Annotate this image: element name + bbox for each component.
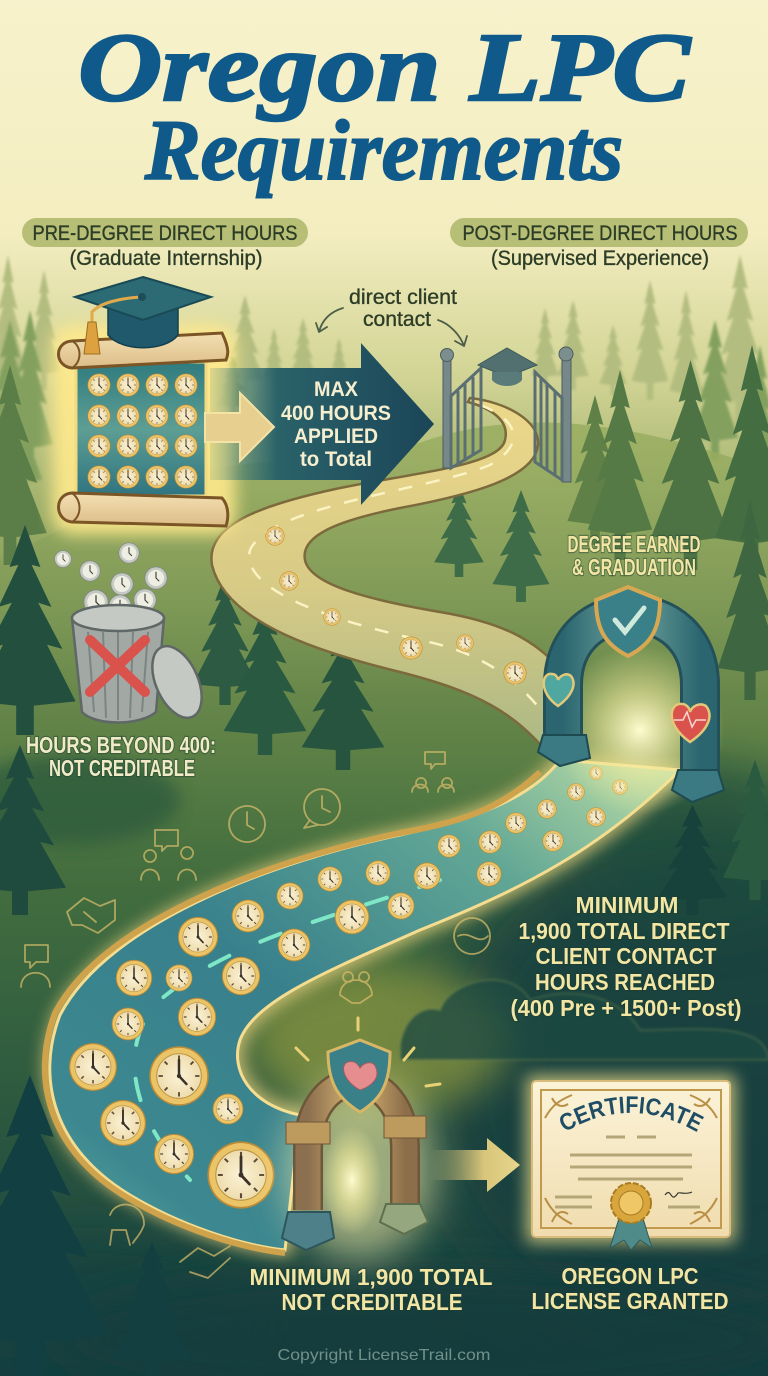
icon: head profile <box>110 1205 144 1245</box>
mid forest trees <box>0 310 768 515</box>
grid of sixteen clocks <box>87 373 198 489</box>
brain shield <box>328 1040 390 1112</box>
bush outline <box>400 980 768 1060</box>
ribbons <box>610 1215 652 1250</box>
certificate <box>514 1063 748 1255</box>
gold seal <box>611 1183 651 1223</box>
icon: open gate with cap <box>440 347 573 482</box>
left arch base <box>538 735 590 766</box>
label: Oregon LPC license granted: OREGON LPC <box>562 1263 698 1289</box>
label: minimum 1,900 total direct client contact hours: HOURS REACHED <box>535 969 715 995</box>
lower ground shading <box>0 760 768 1376</box>
label: minimum 1,900 total not creditable: MINIMUM 1,900 TOTAL <box>250 1264 492 1290</box>
label: hours beyond 400: NOT CREDITABLE <box>49 755 195 781</box>
lower river clocks <box>69 766 628 1209</box>
label: Oregon LPC license granted: LICENSE GRANTED <box>532 1288 728 1314</box>
label: Oregon LPC license granted <box>532 1263 728 1314</box>
bottom scroll roll <box>58 493 228 526</box>
signature <box>665 1192 692 1197</box>
copyright: Copyright LicenseTrail.com <box>278 1347 490 1364</box>
left base <box>282 1212 334 1250</box>
gold line icons: counseling scenes <box>21 752 490 1278</box>
red heart with pulse <box>672 704 709 742</box>
far forest tree line <box>0 255 766 425</box>
heading: pre-degree direct hours <box>22 218 308 270</box>
right base <box>380 1204 428 1234</box>
glow rays <box>296 1018 440 1086</box>
inner cream arrow <box>205 393 274 461</box>
label: minimum 1,900 total direct client contact hours: MINIMUM <box>576 892 678 918</box>
label: minimum 1,900 total direct client contact hours: CLIENT CONTACT <box>536 943 716 969</box>
arrow: to certificate <box>430 1138 520 1192</box>
title: Oregon LPC <box>78 14 692 121</box>
label: hours beyond 400: HOURS BEYOND 400: <box>26 732 216 758</box>
icon: graduation cap <box>75 277 211 354</box>
discarded clocks <box>54 542 168 618</box>
icon: person with speech bubble <box>21 945 50 987</box>
arrow label: MAX <box>314 378 358 401</box>
panel: scroll of pre-degree hours <box>52 325 236 535</box>
arrow label: APPLIED <box>294 425 378 448</box>
certificate corner ornaments <box>545 1095 717 1224</box>
label: minimum 1,900 total not creditable: NOT CREDITABLE <box>282 1289 462 1315</box>
label: minimum 1,900 total direct client contact hours: 1,900 TOTAL DIRECT <box>518 918 730 944</box>
top scroll roll <box>58 333 228 368</box>
label: degree earned and graduation: & GRADUATION <box>572 554 696 580</box>
arrow label: 400 HOURS <box>281 402 391 425</box>
red X <box>90 640 145 692</box>
certificate text lines <box>555 1137 700 1207</box>
callout: direct client contact: contact <box>363 308 431 331</box>
scroll body <box>76 362 206 496</box>
arrow label <box>281 378 391 471</box>
rolling hills <box>0 422 768 900</box>
foreground pine trees <box>0 1075 192 1376</box>
icon: family group <box>340 972 372 1003</box>
dark foreground trees and shrubs <box>0 525 768 1060</box>
label: minimum 1,900 total direct client contact hours: (400 Pre + 1500+ Post) <box>510 995 742 1021</box>
icon: lower handshake <box>180 1246 230 1278</box>
icon: final arch with brain shield <box>282 1018 440 1260</box>
label: hours beyond 400 <box>26 732 216 781</box>
lower glowing river path <box>45 760 680 1253</box>
label: degree earned and graduation <box>568 531 700 580</box>
upper sand road <box>211 398 575 770</box>
can body <box>72 618 164 722</box>
near forest trees <box>0 345 768 700</box>
teal arch <box>563 614 700 775</box>
icon: clock with speech <box>304 789 340 828</box>
upper road clocks <box>265 526 527 685</box>
can lid <box>142 639 212 725</box>
heading: post-degree direct hours: (Supervised Experience) <box>491 247 709 270</box>
arrow label: to Total <box>300 448 372 471</box>
label: minimum 1,900 total direct client contact hours <box>510 892 742 1021</box>
label: minimum 1,900 total not creditable <box>250 1264 492 1315</box>
certificate: CERTIFICATE <box>560 1096 704 1132</box>
wooden arch <box>308 1082 405 1210</box>
callout: direct client contact: direct client <box>349 286 457 309</box>
icon: degree arch with shield and hearts <box>538 587 725 815</box>
callout: direct client contact <box>316 286 467 346</box>
icon: clock <box>229 806 265 842</box>
heading: pre-degree direct hours: (Graduate Internship) <box>70 247 262 270</box>
arrow: max 400 hours applied <box>205 343 434 505</box>
shield with check <box>596 587 660 656</box>
right arch base <box>672 770 724 802</box>
icon: speech and people <box>412 752 454 792</box>
title: Requirements <box>144 102 623 198</box>
icon: trash can with rejected hours <box>54 542 212 725</box>
icon: group of people <box>141 830 196 880</box>
title <box>78 14 692 198</box>
heading: pre-degree direct hours: PRE-DEGREE DIRECT HOURS <box>32 222 298 245</box>
label: degree earned and graduation: DEGREE EARNED <box>568 531 700 557</box>
icon: handshake <box>67 898 115 933</box>
heading: post-degree direct hours <box>450 218 748 270</box>
teal heart <box>544 674 573 706</box>
certificate title <box>562 1113 700 1134</box>
icon: globe <box>454 918 490 954</box>
